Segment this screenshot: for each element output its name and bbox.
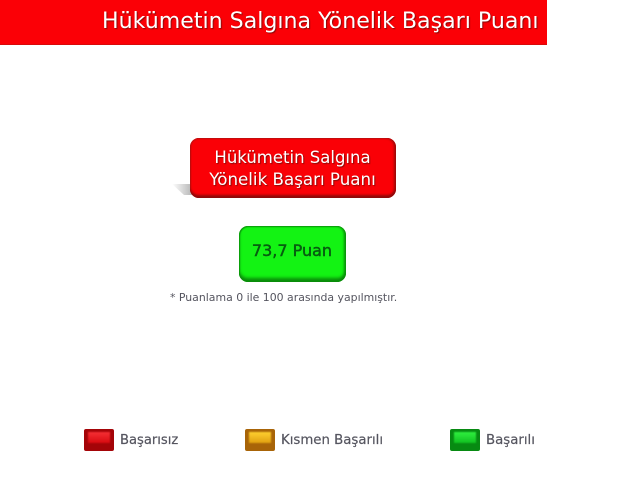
- label: Başarılı: [486, 433, 535, 448]
- title banner: [0, 0, 547, 45]
- legend: başarılı: [450, 429, 535, 451]
- label: Kısmen Başarılı: [281, 433, 383, 448]
- icon: green swatch: [450, 429, 480, 451]
- footnote: * Puanlama 0 ile 100 arasında yapılmıştır.: [170, 291, 397, 304]
- panel: score heading button: [190, 138, 396, 198]
- score value: 73,7 Puan: [252, 241, 332, 260]
- panel shadow: [174, 184, 192, 195]
- legend: başarısız: [84, 429, 178, 451]
- icon: red swatch: [84, 429, 114, 451]
- panel: score value button: [239, 226, 346, 282]
- heading line 2: Yönelik Başarı Puanı: [209, 169, 376, 189]
- icon: orange swatch: [245, 429, 275, 451]
- heading line 1: Hükümetin Salgına: [214, 148, 371, 167]
- legend: kısmen başarılı: [245, 429, 383, 451]
- label: Başarısız: [120, 433, 178, 448]
- title text: Hükümetin Salgına Yönelik Başarı Puanı: [102, 8, 539, 34]
